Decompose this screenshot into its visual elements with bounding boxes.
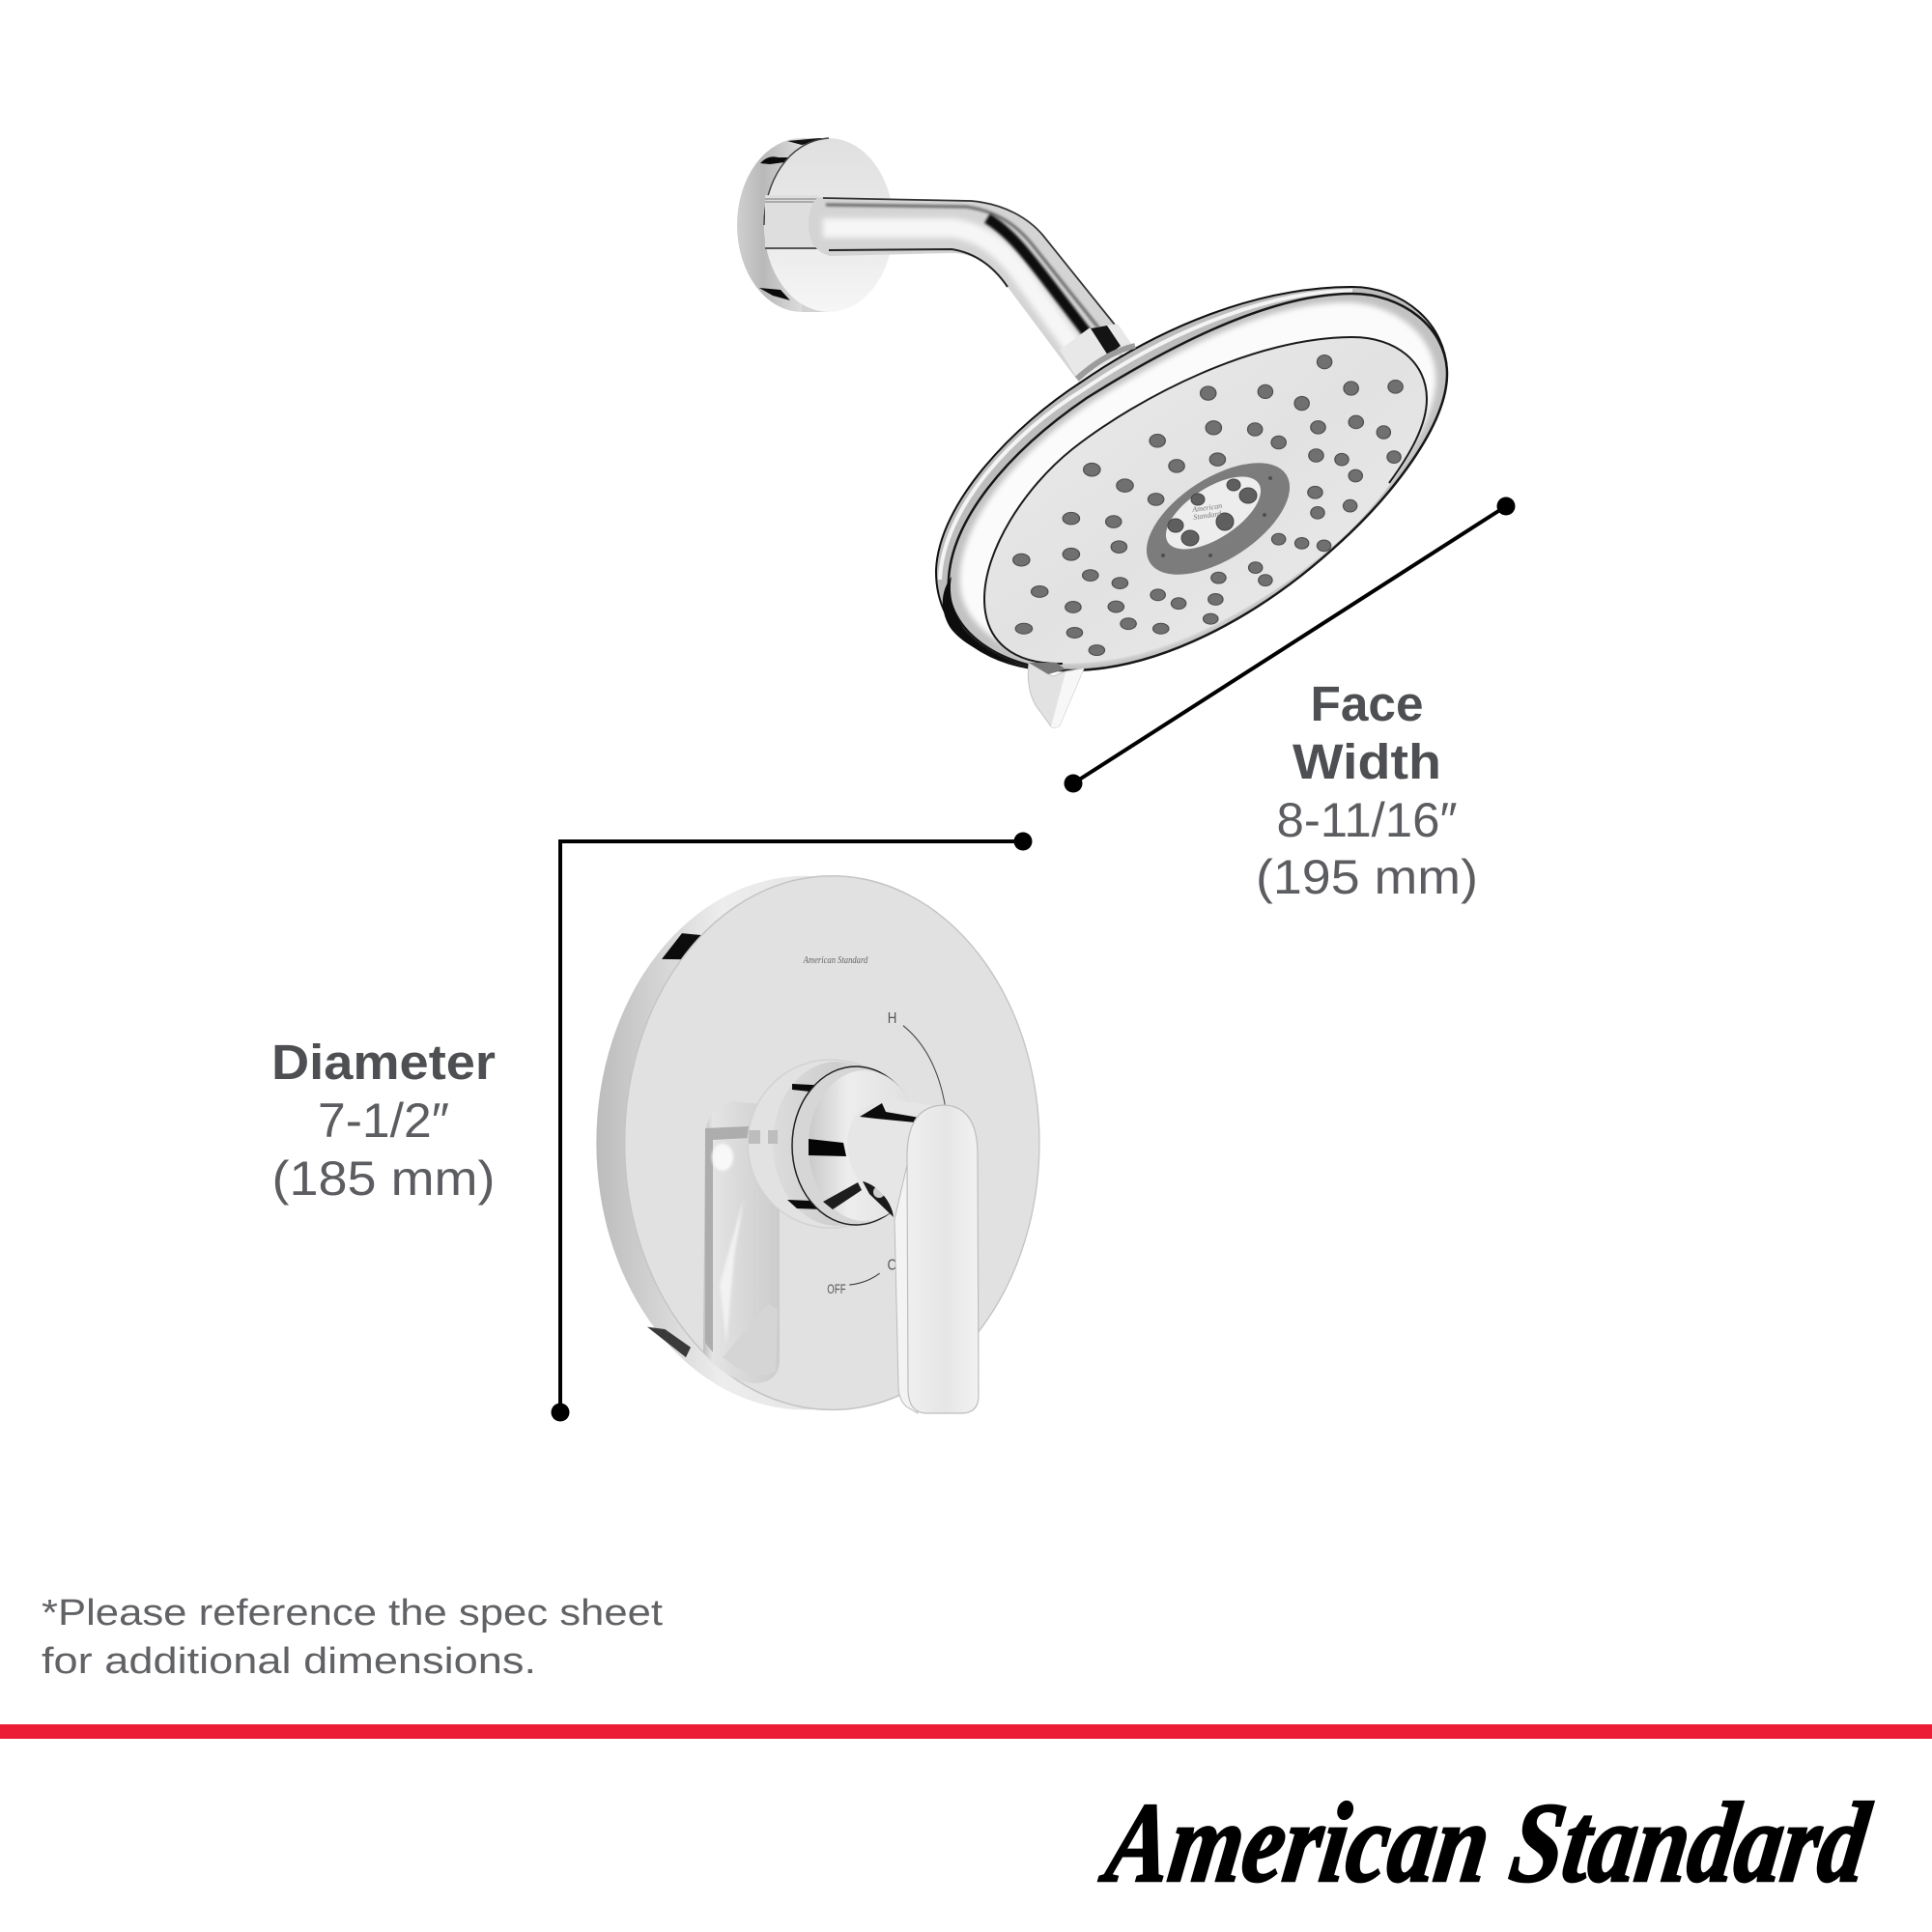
valve trim illustration	[596, 876, 1039, 1413]
head shell	[949, 294, 1447, 670]
face width label: Width	[1293, 734, 1441, 789]
lower left dark crescent	[943, 577, 1048, 669]
escutcheon plate: C	[887, 1258, 896, 1274]
diameter dimension line	[551, 833, 1032, 1422]
face width label: 8-11/16″	[1277, 793, 1457, 847]
arm mounting ring	[1077, 346, 1135, 379]
head face plate	[984, 337, 1427, 664]
escutcheon plate	[596, 876, 1039, 1409]
diameter label: (185 mm)	[272, 1151, 495, 1206]
center nozzle ring	[1128, 440, 1308, 597]
face width label: Face	[1310, 676, 1424, 731]
head outer rim	[936, 287, 1447, 670]
diameter label	[271, 1035, 496, 1206]
neck highlight	[860, 1103, 920, 1122]
face width dimension line	[1065, 497, 1515, 792]
lever blade	[907, 1105, 979, 1413]
face width label: (195 mm)	[1256, 850, 1478, 904]
shell highlight	[959, 302, 1435, 662]
center nozzle ring: Standard	[1193, 509, 1223, 522]
footnote	[42, 1593, 664, 1682]
footnote: *Please reference the spec sheet	[42, 1593, 664, 1634]
face width label	[1256, 676, 1478, 904]
red divider bar	[0, 1724, 1932, 1739]
lever neck	[847, 1099, 942, 1227]
diameter label: 7-1/2″	[318, 1094, 449, 1148]
footnote: for additional dimensions.	[42, 1641, 536, 1682]
escutcheon plate: OFF	[827, 1281, 846, 1296]
escutcheon plate: American Standard	[803, 955, 867, 966]
face outline	[984, 337, 1427, 664]
shower head and arm illustration	[737, 138, 1447, 727]
spray selector lever	[1028, 663, 1084, 727]
rim contour	[940, 291, 1352, 580]
lever shadow side	[895, 1140, 918, 1413]
diameter label: Diameter	[271, 1035, 496, 1090]
control hub	[748, 1060, 921, 1228]
center nozzle ring: American	[1191, 501, 1223, 514]
handle reflection panel	[703, 1101, 780, 1383]
wall flange	[737, 138, 894, 312]
shower arm	[765, 195, 1132, 386]
escutcheon plate: H	[888, 1010, 896, 1027]
spray holes	[1013, 355, 1403, 656]
